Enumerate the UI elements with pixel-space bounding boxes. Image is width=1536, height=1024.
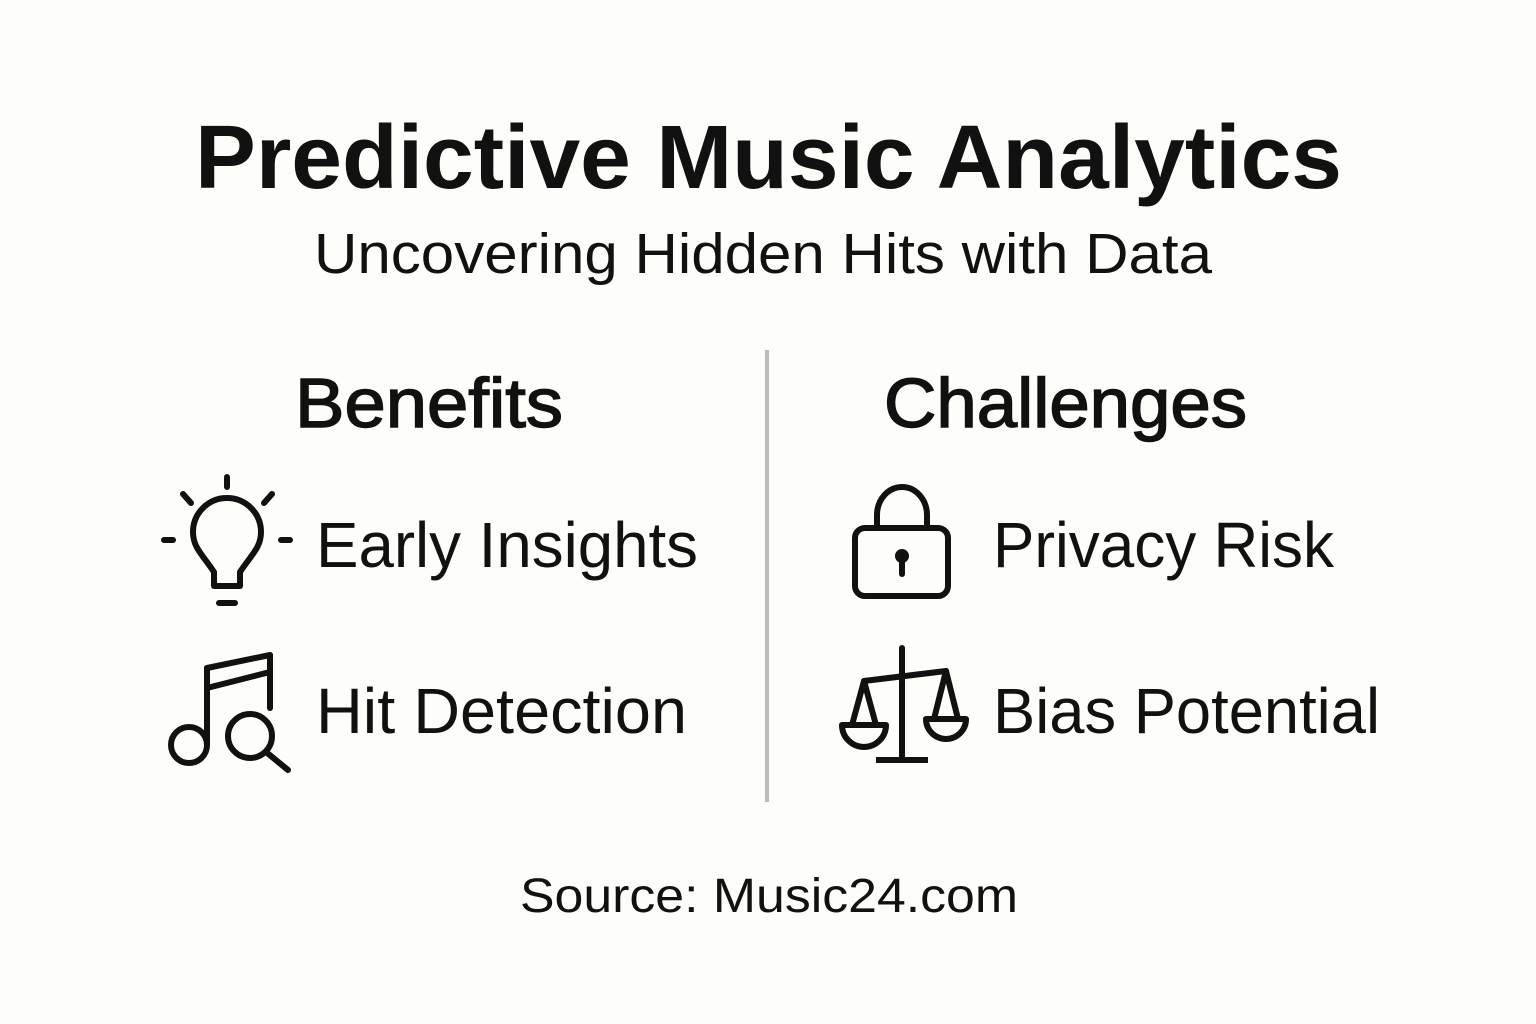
heading: Challenges: Challenges <box>884 364 1247 442</box>
text: Early Insights: Early Insights <box>316 509 698 581</box>
subtitle: Uncovering Hidden Hits with Data <box>314 222 1212 286</box>
source: Source: Music24.com <box>520 870 1018 923</box>
icon: scales <box>842 648 966 760</box>
text: Bias Potential: Bias Potential <box>993 675 1380 747</box>
icon: padlock <box>855 487 948 596</box>
heading: Benefits: Benefits <box>295 364 563 442</box>
icon: music note with magnifier <box>171 655 288 770</box>
icon: light bulb <box>164 477 290 603</box>
title: Predictive Music Analytics <box>195 108 1342 208</box>
text: Hit Detection: Hit Detection <box>316 675 687 747</box>
text: Privacy Risk: Privacy Risk <box>993 509 1335 581</box>
